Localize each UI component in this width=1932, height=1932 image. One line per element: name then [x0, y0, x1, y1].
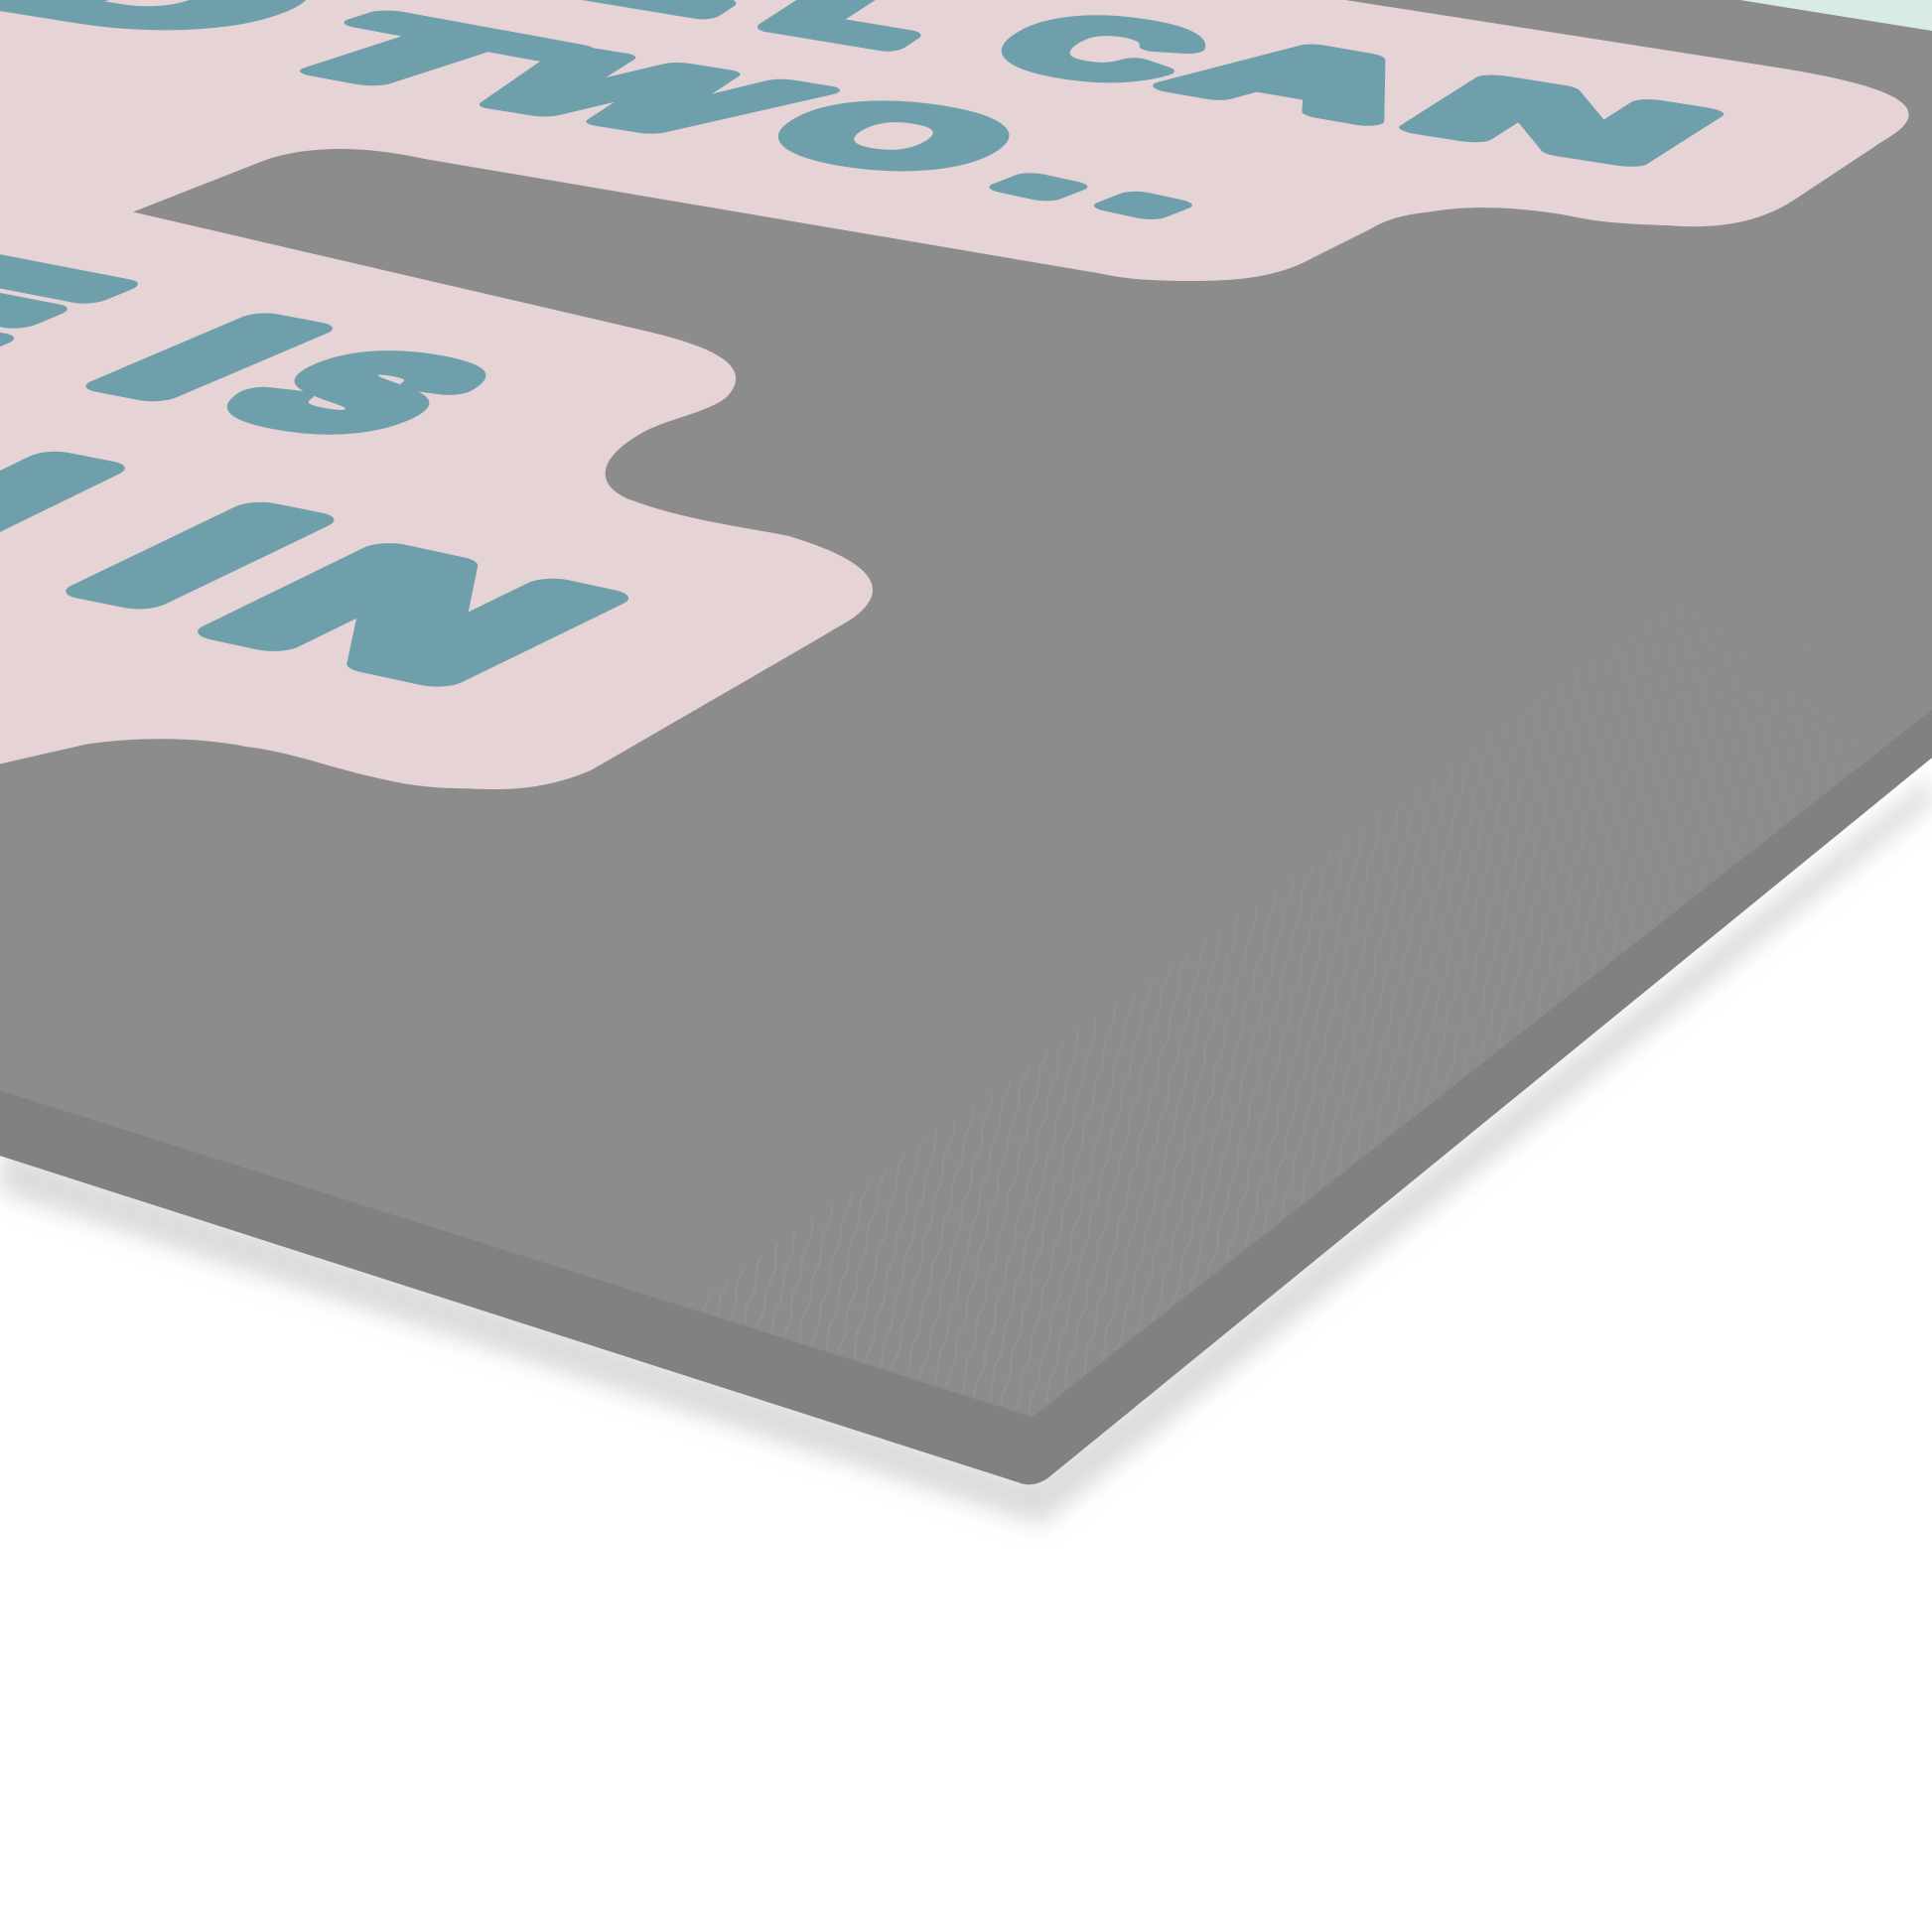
pink speech bubble panel [0, 0, 1909, 789]
lettering second line: AND TWO..: . [1063, 147, 1308, 230]
lettering fourth line: IN [0, 432, 674, 707]
lettering second line: AND TWO..: O [733, 80, 1054, 192]
lettering second line: AND TWO..: W [418, 38, 857, 150]
lettering second line: AND TWO..: . [959, 129, 1203, 212]
lettering second line: AND TWO..: T [213, 2, 615, 106]
lettering third line: ONE IS: I [45, 297, 373, 418]
lettering second line: AND TWO.. [0, 0, 1308, 230]
lettering third line: ONE IS: S [172, 330, 543, 455]
board top surface [0, 0, 1932, 1417]
lettering fourth line: IN: N [154, 523, 674, 707]
lettering third line: ONE IS [0, 237, 543, 455]
surface grain texture [718, 1268, 923, 1368]
lettering top line: ALL CAN: A [1145, 22, 1464, 136]
product photo: angled glass board corner [0, 0, 1932, 1529]
mint panel at top right [1739, 0, 1932, 31]
drop shadow under board [0, 776, 1932, 1525]
lettering top line: ALL CAN [549, 0, 1745, 179]
lettering top line: ALL CAN: N [1378, 63, 1745, 179]
board edge [0, 690, 1932, 1484]
lettering fourth line: IN: I [21, 483, 379, 628]
